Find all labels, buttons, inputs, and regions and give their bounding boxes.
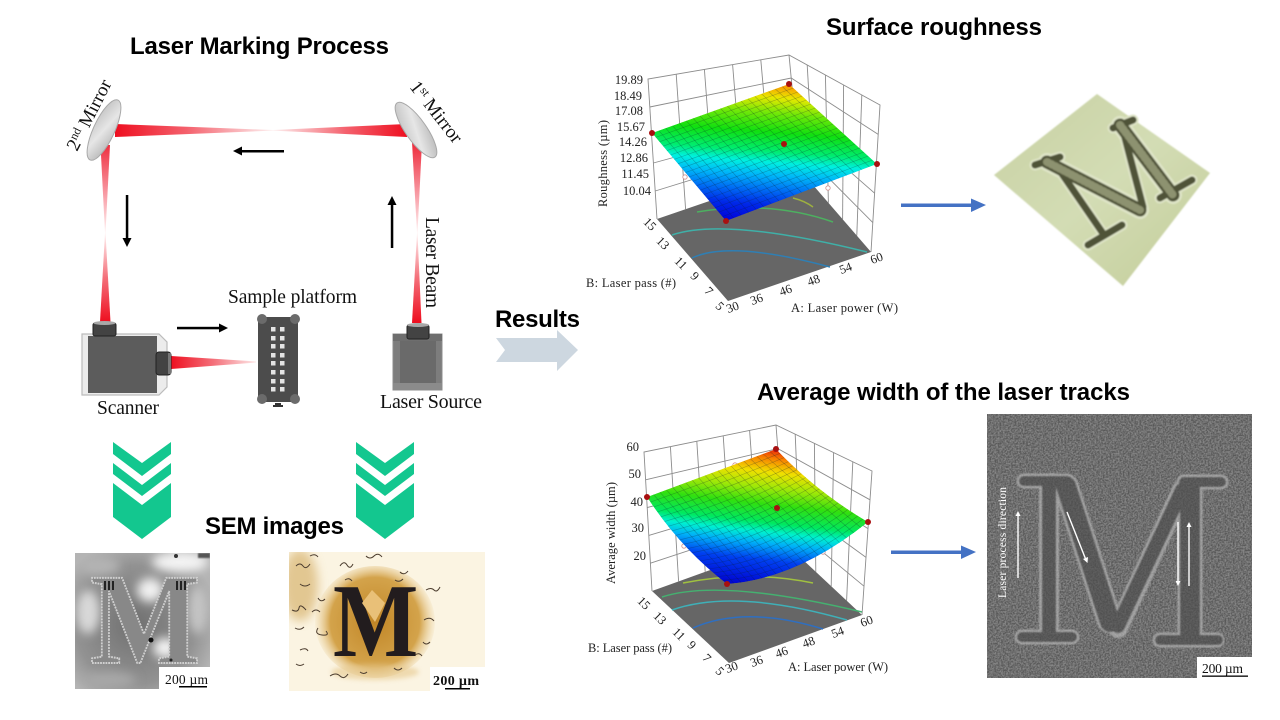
- laser power ticks: 54: [829, 623, 847, 641]
- y axis title: Roughness (µm): [596, 120, 610, 207]
- y axis labels: 12.86: [620, 151, 648, 165]
- laser power ticks: 60: [868, 250, 885, 267]
- scale bar: grey SEM: [159, 667, 210, 689]
- laser power ticks: 46: [777, 282, 794, 299]
- label: laser process direction: Laser process direction: [997, 487, 1009, 598]
- laser power ticks: 36: [748, 653, 765, 670]
- heading: Average width of the laser tracks: Average width of the laser tracks: [757, 379, 1130, 406]
- image: grey SEM M: [75, 547, 210, 691]
- arrow: width to SEM: [891, 546, 976, 559]
- y axis labels: 60: [626, 440, 639, 454]
- label: scanner: Scanner: [97, 398, 160, 419]
- label: laser source: Laser Source: [380, 391, 482, 413]
- laser beam: scanner column: [100, 145, 110, 322]
- etched M tracks: [1022, 481, 1221, 640]
- y axis labels: [626, 440, 646, 563]
- heading: Surface roughness: Surface roughness: [826, 14, 1042, 41]
- y axis labels: 17.08: [615, 104, 643, 118]
- icon: left green chevrons: [113, 442, 171, 539]
- chart walls: [648, 55, 880, 252]
- scale bar: optical micrograph: 200 µm: [433, 674, 479, 689]
- y axis labels: 20: [634, 549, 646, 563]
- image: optical micrograph M: [282, 549, 485, 691]
- laser pass ticks: [634, 594, 727, 678]
- y axis labels: 30: [632, 521, 644, 535]
- white process direction arrows: [1016, 511, 1192, 586]
- icon: laser source: [393, 323, 442, 390]
- label: laser beam: Laser Beam: [421, 217, 442, 308]
- icon: right green chevrons: [356, 442, 414, 539]
- y axis labels: 40: [630, 495, 643, 509]
- laser pass ticks: 7: [702, 284, 716, 298]
- laser pass ticks: 7: [700, 651, 714, 665]
- image: green sample with M: [994, 94, 1210, 286]
- laser power ticks: 46: [773, 644, 790, 661]
- heading: Results: Results: [495, 306, 580, 333]
- letter M in grey SEM: M: [90, 547, 200, 691]
- laser beam: scanner to sample: [171, 356, 256, 369]
- laser power ticks: [724, 250, 885, 316]
- title: Laser Marking Process: Laser Marking Process: [130, 33, 389, 60]
- laser power ticks: [723, 613, 875, 676]
- arrow: down toward scanner: [122, 195, 132, 247]
- laser pass ticks: 13: [650, 609, 669, 628]
- arrow: left along top beam: [233, 146, 284, 156]
- arrow: roughness to sample: [901, 198, 986, 212]
- icon: sample platform: [257, 314, 300, 407]
- chart: roughness response surface: [586, 55, 898, 316]
- laser pass ticks: 5: [713, 664, 727, 678]
- label: 2nd mirror: nd: [66, 125, 84, 142]
- x axis title: laser pass: B: Laser pass (#): [586, 276, 676, 290]
- surface mesh: [647, 449, 868, 584]
- label: sample platform: Sample platform: [228, 287, 357, 308]
- laser pass ticks: 9: [685, 638, 699, 652]
- letter M in optical micrograph: M: [333, 564, 418, 680]
- arrow: results: [496, 330, 578, 371]
- y axis labels: 18.49: [614, 89, 642, 103]
- design points: [644, 446, 871, 587]
- laser pass ticks: 11: [670, 625, 688, 643]
- chart: average width response surface: [588, 425, 888, 678]
- laser beam: mirror to mirror: [115, 124, 407, 137]
- icon: 1st mirror: [388, 97, 444, 163]
- laser power ticks: 60: [858, 613, 875, 630]
- label: 1st mirror: Mirror: [416, 91, 467, 148]
- label: 2nd mirror: 2: [63, 136, 86, 154]
- laser pass ticks: 11: [672, 254, 690, 272]
- scale bar: laser tracks: [1197, 657, 1252, 678]
- y axis labels: 14.26: [619, 135, 647, 149]
- y axis labels: 19.89: [615, 73, 643, 87]
- heading: SEM images: SEM images: [205, 513, 344, 540]
- scale bar: optical micrograph: [430, 667, 485, 691]
- icon: scanner: [82, 321, 171, 395]
- x axis title: laser power: A: Laser power (W): [791, 301, 898, 315]
- chart floor with contours: [657, 170, 871, 301]
- y axis labels: [614, 73, 652, 198]
- laser pass ticks: 9: [688, 269, 702, 283]
- laser power ticks: 30: [723, 659, 740, 676]
- y axis title: Average width (µm): [604, 482, 618, 584]
- laser pass ticks: [640, 215, 727, 313]
- etched M on sample: [1035, 120, 1192, 245]
- panel: laser marking diagram: [62, 75, 482, 419]
- label: 1st mirror: st: [417, 84, 434, 99]
- y axis labels: 10.04: [623, 184, 652, 198]
- y axis labels: 11.45: [621, 167, 649, 181]
- arrow: up from source: [388, 196, 396, 248]
- laser pass ticks: 13: [653, 234, 672, 253]
- icon: 2nd mirror: [81, 96, 127, 164]
- laser power ticks: 48: [805, 272, 822, 289]
- chart walls: [644, 425, 872, 615]
- surface mesh: [652, 84, 877, 221]
- scale bar: grey SEM: 200 µm: [165, 672, 208, 687]
- laser beam: source column: [412, 142, 422, 323]
- x axis title: laser power: A: Laser power (W): [788, 660, 888, 674]
- y axis labels: 50: [628, 467, 641, 481]
- x axis title: laser pass: B: Laser pass (#): [588, 641, 672, 655]
- scale bar: laser tracks: 200 µm: [1202, 661, 1243, 676]
- image: SEM of laser tracks: [987, 414, 1252, 678]
- laser power ticks: 30: [724, 299, 741, 316]
- chart floor with contours: [652, 543, 862, 663]
- laser pass ticks: 15: [640, 215, 659, 234]
- laser pass ticks: 15: [634, 594, 653, 613]
- laser power ticks: 36: [748, 291, 765, 308]
- laser pass ticks: 5: [713, 299, 727, 313]
- laser power ticks: 48: [800, 634, 817, 651]
- y axis labels: 15.67: [617, 120, 645, 134]
- laser power ticks: 54: [837, 259, 855, 277]
- arrow: scanner to platform: [177, 324, 228, 332]
- label: 2nd mirror: Mirror: [73, 76, 117, 135]
- label: 1st mirror: 1: [405, 77, 427, 98]
- design points: [649, 81, 880, 224]
